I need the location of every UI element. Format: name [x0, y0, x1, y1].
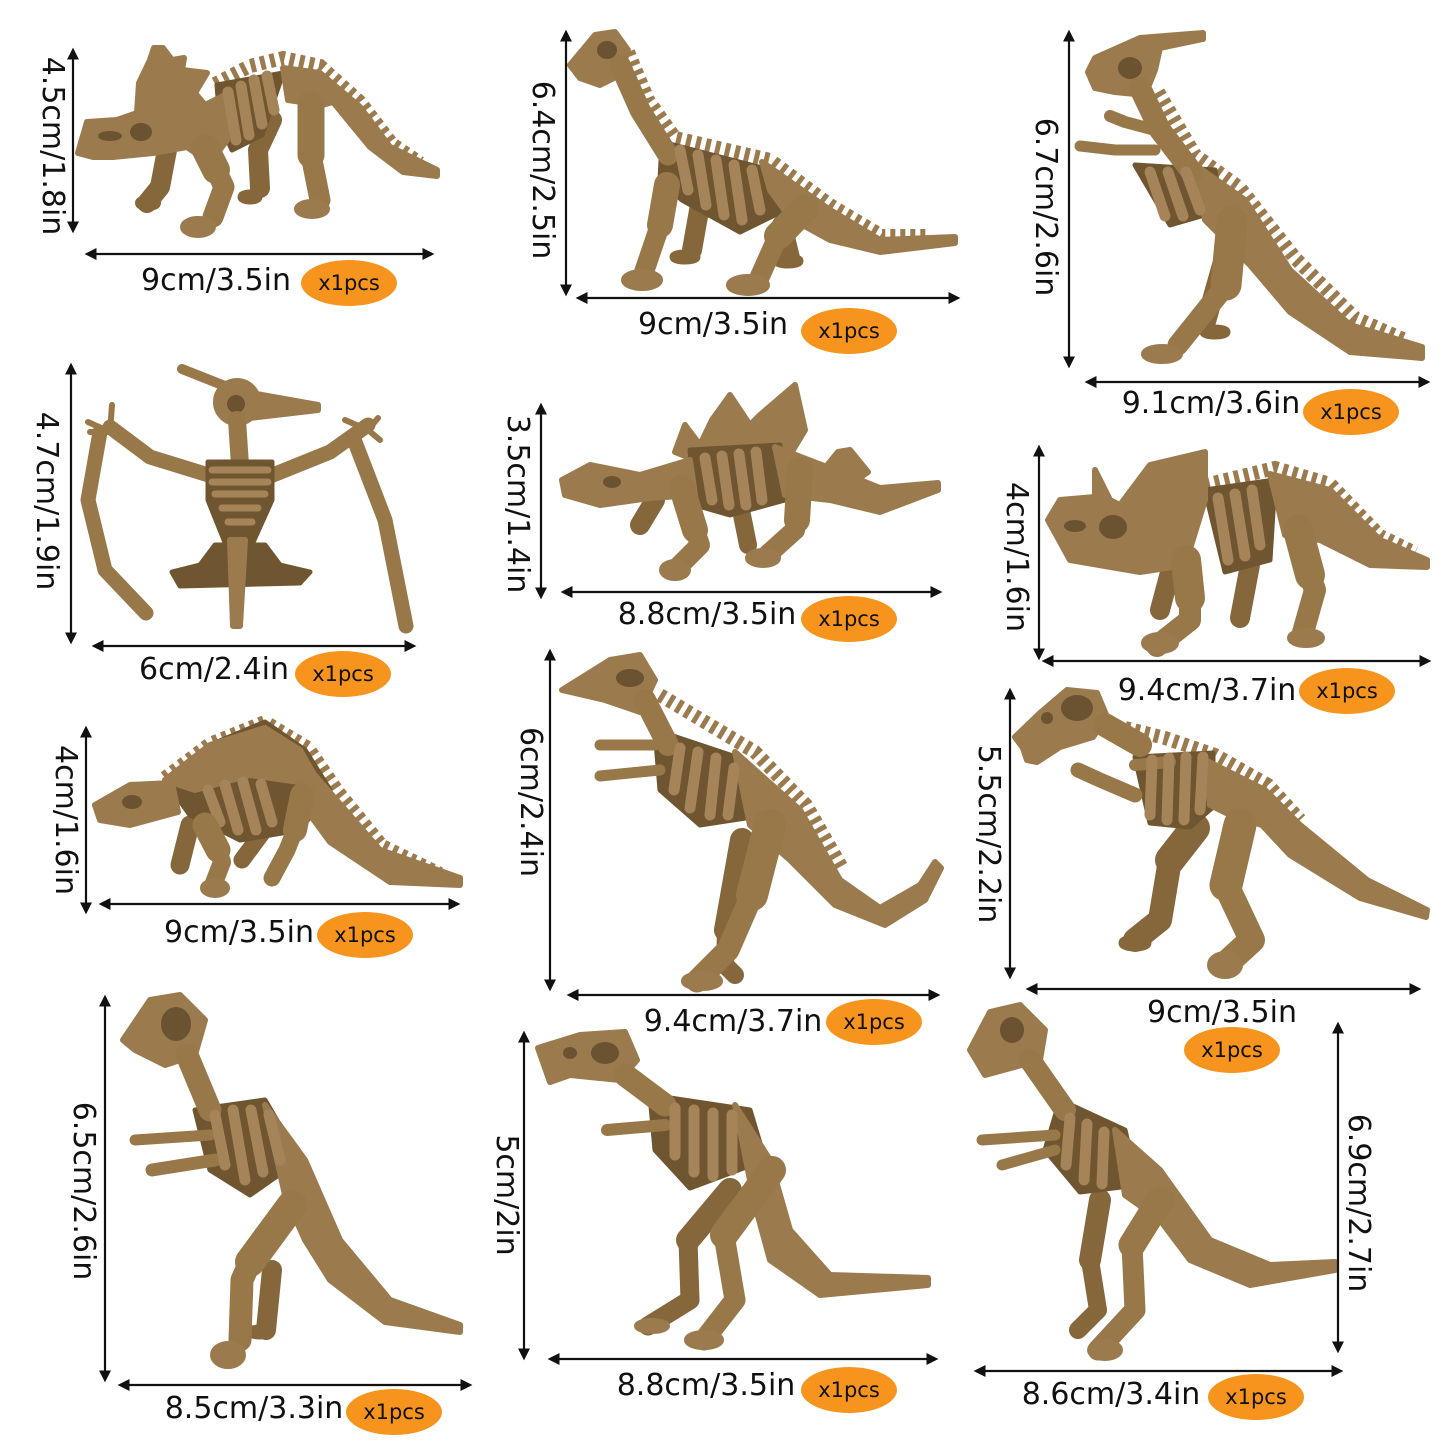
panel: triceratops large: [999, 447, 1429, 714]
quantity badge: x1pcs: [1225, 1385, 1287, 1409]
dinosaur skeleton 6: [1048, 452, 1427, 651]
dinosaur skeleton 12: [970, 1005, 1335, 1358]
height label: 6.7cm/2.6in: [1028, 118, 1063, 296]
quantity badge: x1pcs: [818, 319, 880, 343]
height arrow: [1009, 690, 1011, 977]
height label: 4cm/1.6in: [999, 482, 1034, 632]
width label: 9cm/3.5in: [1147, 995, 1297, 1030]
height label: 5.5cm/2.2in: [971, 745, 1006, 923]
width label: 8.6cm/3.4in: [1022, 1377, 1200, 1412]
width arrow: [550, 1358, 936, 1360]
dinosaur skeleton 9: [1015, 690, 1427, 976]
height arrow: [565, 32, 567, 294]
width arrow: [1087, 381, 1428, 383]
dinosaur skeleton 11: [538, 1032, 928, 1347]
width arrow: [1028, 988, 1419, 990]
height label: 6.9cm/2.7in: [1341, 1114, 1376, 1292]
height arrow: [85, 728, 87, 912]
dinosaur skeleton 2: [570, 32, 955, 293]
quantity badge: [826, 999, 922, 1045]
height arrow: [104, 997, 106, 1380]
panel: ankylosaur: [48, 722, 460, 958]
quantity badge: [346, 1389, 442, 1435]
quantity badge: [1299, 668, 1395, 714]
width arrow: [1044, 660, 1429, 662]
width arrow: [101, 903, 458, 905]
panel: pachycephalosaur left: [66, 995, 470, 1435]
panel: brachiosaurus: [525, 32, 958, 354]
dinosaur skeleton 10: [123, 995, 460, 1366]
height arrow: [540, 405, 542, 597]
width label: 8.5cm/3.3in: [165, 1391, 343, 1426]
width label: 8.8cm/3.5in: [617, 1368, 795, 1403]
height arrow: [549, 651, 551, 989]
quantity badge: x1pcs: [318, 271, 380, 295]
quantity badge: x1pcs: [1201, 1038, 1263, 1062]
width label: 9cm/3.5in: [638, 307, 788, 342]
panel: triceratops small: [35, 48, 437, 306]
quantity badge: [317, 912, 413, 958]
panel: stegosaurus: [500, 385, 940, 642]
quantity badge: x1pcs: [363, 1400, 425, 1424]
height arrow: [70, 365, 72, 642]
height label: 4cm/1.6in: [48, 745, 83, 895]
panel: raptor centre: [513, 651, 941, 1045]
height arrow: [1068, 32, 1070, 366]
width label: 9.1cm/3.6in: [1122, 386, 1300, 421]
dinosaur skeleton 3: [1080, 33, 1422, 361]
height label: 4.7cm/1.9in: [29, 412, 64, 590]
dinosaur skeleton 8: [562, 655, 941, 988]
quantity badge: [1208, 1374, 1304, 1420]
width arrow: [976, 1370, 1341, 1372]
width label: 9.4cm/3.7in: [1118, 673, 1296, 708]
quantity badge: [295, 651, 391, 697]
width arrow: [563, 591, 940, 593]
quantity badge: [301, 260, 397, 306]
quantity badge: x1pcs: [818, 607, 880, 631]
width arrow: [87, 253, 432, 255]
quantity badge: [1303, 389, 1399, 435]
panel: tyrannosaur right: [971, 690, 1427, 1073]
height label: 6cm/2.4in: [513, 727, 548, 877]
height label: 3.5cm/1.4in: [500, 415, 535, 593]
quantity badge: x1pcs: [1316, 679, 1378, 703]
quantity badge: x1pcs: [1320, 400, 1382, 424]
quantity badge: x1pcs: [843, 1010, 905, 1034]
height label: 6.5cm/2.6in: [66, 1102, 101, 1280]
height arrow: [1038, 447, 1040, 658]
quantity badge: [801, 308, 897, 354]
width label: 8.8cm/3.5in: [618, 597, 796, 632]
width arrow: [569, 994, 938, 996]
width arrow: [120, 1384, 470, 1386]
dinosaur skeleton 4: [88, 369, 406, 626]
quantity badge: [801, 596, 897, 642]
panel: allosaur centre: [489, 1032, 936, 1413]
quantity badge: x1pcs: [312, 662, 374, 686]
quantity badge: x1pcs: [818, 1378, 880, 1402]
width label: 9.4cm/3.7in: [644, 1004, 822, 1039]
height label: 6.4cm/2.5in: [525, 81, 560, 259]
panel: pterosaur: [29, 365, 414, 697]
height arrow: [1337, 1024, 1339, 1351]
dinosaur skeleton 5: [562, 385, 938, 578]
quantity badge: [801, 1367, 897, 1413]
height arrow: [72, 50, 74, 231]
dinosaur skeleton 7: [95, 722, 460, 895]
height arrow: [523, 1033, 525, 1358]
width label: 6cm/2.4in: [139, 652, 289, 687]
dinosaur skeleton 1: [78, 48, 437, 235]
width arrow: [578, 297, 958, 299]
panel: parasaurolophus: [1028, 32, 1428, 435]
width label: 9cm/3.5in: [141, 263, 291, 298]
width label: 9cm/3.5in: [164, 915, 314, 950]
width arrow: [94, 645, 414, 647]
height label: 5cm/2in: [489, 1134, 524, 1256]
quantity badge: [1184, 1027, 1280, 1073]
quantity badge: x1pcs: [334, 923, 396, 947]
height label: 4.5cm/1.8in: [35, 57, 70, 235]
panel: dilophosaur right: [970, 1005, 1376, 1420]
